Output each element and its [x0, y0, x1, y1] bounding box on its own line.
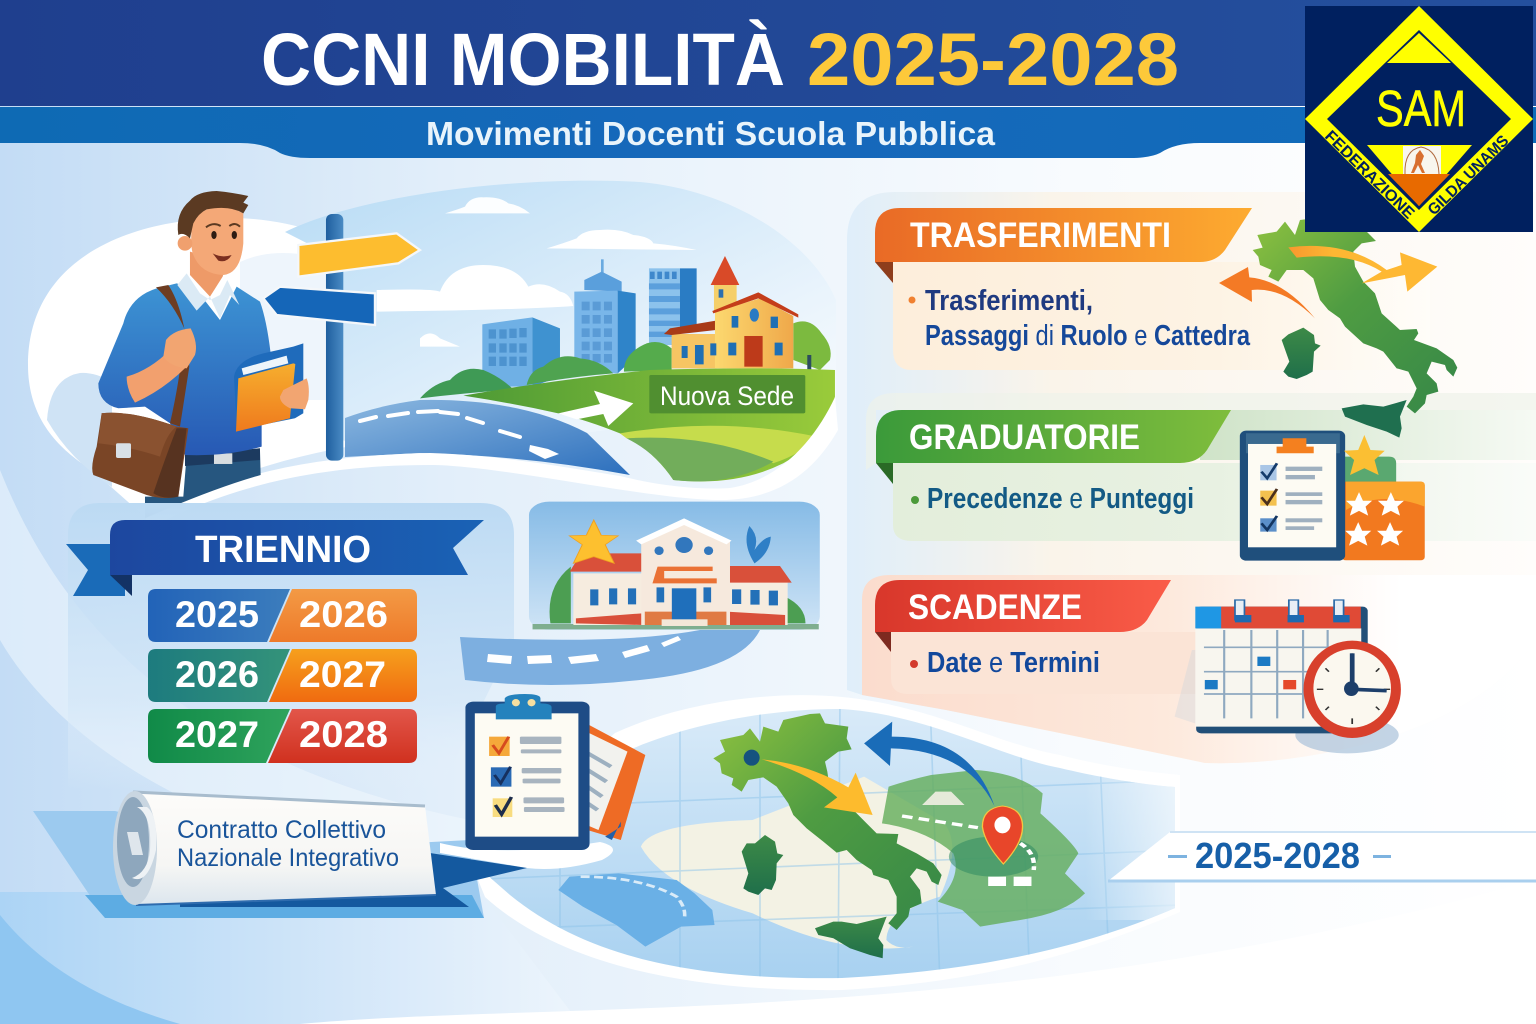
subtitle: Movimenti Docenti Scuola Pubblica — [426, 115, 996, 152]
header ribbon — [875, 208, 1252, 262]
header ribbon — [875, 580, 1171, 632]
pale band behind scroll — [33, 811, 484, 918]
bag — [92, 413, 188, 498]
band — [1200, 410, 1536, 460]
clouds — [377, 197, 697, 347]
year bar 2025 2026: 2025 — [175, 594, 259, 635]
cream land — [641, 777, 952, 949]
Sicily — [815, 917, 887, 958]
white plate under clipboard — [440, 842, 613, 869]
location pin — [982, 806, 1023, 864]
green hill with label — [463, 368, 835, 481]
fold — [875, 262, 893, 283]
blue region left — [558, 873, 715, 947]
clip — [1277, 438, 1314, 453]
white arrow — [558, 391, 633, 426]
clip — [496, 694, 552, 719]
green region south — [882, 770, 1085, 927]
road — [345, 400, 630, 475]
date text: 2025-2028 — [1195, 835, 1360, 876]
signpost — [263, 214, 420, 461]
forearm and hand — [127, 350, 187, 403]
bottom white wave — [300, 880, 1536, 1024]
blue folder — [234, 343, 303, 430]
ribbon — [110, 520, 484, 575]
panel: graduatorie — [866, 393, 1536, 541]
bullet — [911, 496, 919, 504]
papers — [242, 356, 288, 375]
icon: clipboard with stars — [1240, 431, 1425, 561]
scene: sky with clouds — [47, 181, 836, 487]
gold star — [1344, 435, 1385, 475]
SAM: SAM — [1376, 80, 1466, 137]
pale hill at left — [47, 373, 112, 487]
orange folder — [236, 363, 295, 432]
school card — [529, 502, 820, 630]
section wash — [862, 575, 1536, 763]
calendar body — [1196, 607, 1368, 733]
map of Italy section — [460, 690, 1180, 990]
pale cloud beside teacher — [240, 253, 330, 400]
church-like school — [664, 256, 798, 368]
triennio label: TRIENNIO — [195, 529, 371, 571]
star rating card — [1342, 482, 1425, 560]
title years: 2025-2028 — [807, 18, 1179, 101]
date banner — [1108, 832, 1536, 882]
bottom-left deep corner — [0, 915, 180, 1024]
year bar 2027 2028: 2028 — [299, 714, 388, 755]
heading: TRASFERIMENTI — [910, 216, 1171, 255]
scroll end roll — [113, 791, 157, 905]
trousers — [145, 450, 261, 518]
blue ribbon tail — [180, 853, 527, 907]
fold — [876, 463, 893, 484]
icon: calendar with clock — [1175, 600, 1401, 753]
year bar 2026 2027: 2027 — [299, 654, 386, 695]
Italy main with islands — [713, 713, 942, 958]
year bar 2026 2027: 2026 — [175, 654, 259, 695]
heading: SCADENZE — [908, 588, 1082, 627]
body text: Precedenze e Punteggi — [927, 483, 1194, 515]
panel: triennio — [66, 503, 514, 790]
hand on folder — [280, 378, 309, 409]
board — [465, 702, 590, 850]
checkbox rows — [489, 737, 510, 756]
blue arrow — [864, 722, 994, 806]
clock — [1303, 641, 1401, 738]
teacher — [92, 191, 309, 518]
year bar 2026 2027 — [148, 649, 417, 702]
body text: Trasferimenti, — [925, 285, 1093, 317]
body — [891, 632, 1200, 694]
panel: trasferimenti — [875, 208, 1430, 370]
Nuova Sede label box — [649, 375, 805, 413]
panel: scadenze — [862, 575, 1536, 763]
emblem figure — [1405, 147, 1439, 174]
header ribbon — [876, 410, 1231, 463]
hair — [178, 191, 248, 238]
collar — [177, 273, 239, 318]
blue sign — [263, 287, 375, 325]
rings — [1235, 600, 1344, 620]
head — [191, 207, 243, 275]
trees — [420, 321, 831, 398]
scroll: contratto — [113, 791, 527, 907]
heading: GRADUATORIE — [909, 418, 1140, 457]
ribbon tail — [66, 544, 125, 596]
strap — [156, 285, 189, 427]
belt — [185, 448, 260, 466]
fold — [875, 632, 891, 652]
panel: trasferimenti: Passaggi di Ruolo e Cattedra — [925, 320, 1251, 352]
header band — [0, 0, 1536, 158]
Nuova Sede text: Nuova Sede — [660, 381, 794, 411]
body — [893, 262, 1430, 370]
body text: Date e Termini — [927, 647, 1100, 679]
Sardinia — [742, 835, 783, 895]
tower 3 — [649, 268, 697, 345]
board — [1240, 431, 1345, 561]
icon: Italy map with arrows — [1219, 217, 1457, 438]
neck — [190, 252, 227, 297]
sweater — [98, 283, 271, 455]
right edge fade — [1098, 777, 1175, 920]
title: CCNI MOBILITÀ — [261, 18, 785, 101]
year bar 2027 2028 — [148, 709, 417, 763]
building 1 — [482, 317, 560, 387]
star — [569, 520, 618, 563]
winding road below school — [460, 630, 760, 685]
scroll body — [133, 792, 436, 905]
grid lines — [490, 709, 1172, 978]
papers behind — [583, 722, 645, 840]
scroll text: Contratto Collettivo — [177, 816, 386, 844]
tower 2 — [574, 259, 636, 373]
white swoosh under road — [146, 397, 838, 530]
checklist rows — [1260, 465, 1277, 480]
white blob behind teacher — [28, 218, 395, 517]
yellow sign — [298, 233, 420, 277]
bottom-left blue area — [0, 892, 580, 1024]
right panels backdrop — [847, 192, 1536, 763]
clipboard — [465, 694, 645, 850]
grid — [1204, 630, 1360, 718]
year bar 2025 2026: 2026 — [299, 594, 388, 635]
scroll: contratto: Nazionale Integrativo — [177, 844, 399, 872]
year bar 2025 2026 — [148, 589, 417, 642]
bullet — [908, 296, 916, 304]
subtitle band — [0, 107, 1536, 158]
left side swoosh — [0, 470, 470, 880]
Federazione: FEDERAZIONE — [1321, 128, 1418, 223]
bullet — [910, 660, 918, 668]
city and new school scene — [420, 256, 831, 398]
face — [211, 231, 217, 239]
Gilda Unams: GILDA UNAMS — [1425, 132, 1513, 219]
ribbon fold — [110, 575, 132, 596]
logo: SAM Federazione Gilda Unams — [1305, 6, 1533, 232]
body — [893, 463, 1536, 541]
section wash — [866, 393, 1536, 470]
yellow arrow — [762, 759, 873, 815]
origin dot — [744, 750, 760, 766]
events — [1257, 657, 1270, 666]
year bar 2027 2028: 2027 — [175, 714, 259, 755]
